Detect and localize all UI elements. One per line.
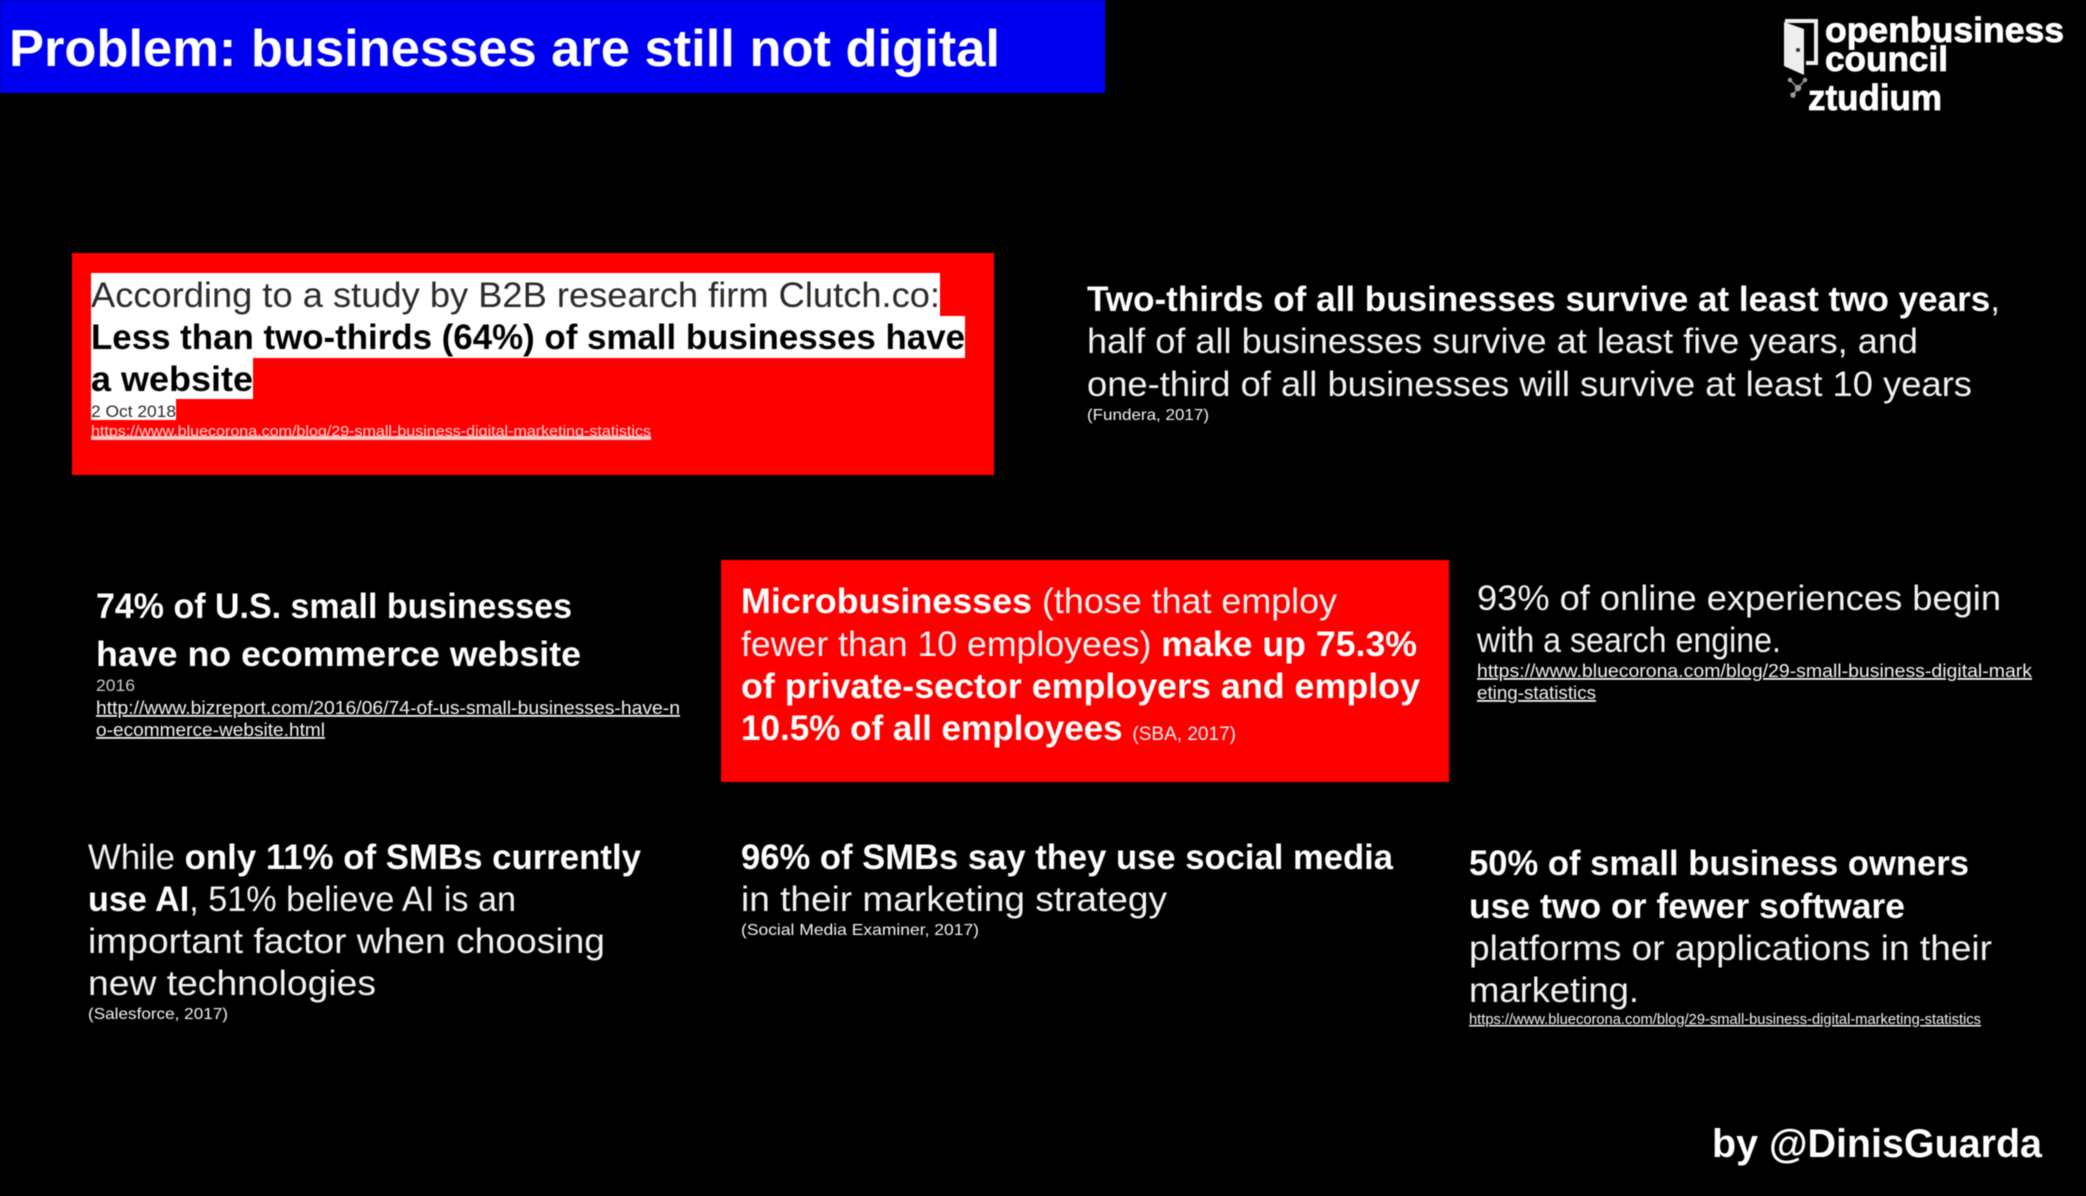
text block: search engine: 93% of online experiences begin	[1477, 579, 2001, 618]
text block: ecommerce statistic: o-ecommerce-website.html	[96, 720, 325, 740]
text block: search engine: https://www.bluecorona.com/blog/29-small-business-digital-mark	[1477, 661, 2033, 681]
text block: AI adoption: While only 11% of SMBs currently	[88, 838, 642, 877]
author credit: by @DinisGuarda	[1712, 1122, 2043, 1166]
text block: search engine	[1476, 579, 2033, 703]
text block: ecommerce statistic: 74% of U.S. small businesses	[96, 587, 572, 626]
logo: open business council and ztudium: council	[1825, 40, 1948, 79]
text block: AI adoption: use AI, 51% believe AI is an	[88, 880, 516, 919]
panel: microbusinesses: of private-sector employers and employ	[741, 667, 1421, 706]
panel: website statistic: 2 Oct 2018	[91, 402, 176, 421]
text block: ecommerce statistic: 2016	[96, 676, 135, 695]
text block: software platforms: use two or fewer software	[1469, 887, 1905, 926]
title banner: Problem: businesses are still not digital	[9, 20, 1000, 78]
text block: ecommerce statistic: have no ecommerce website	[96, 635, 581, 674]
logo: open business council and ztudium: openbusiness	[1825, 11, 2064, 50]
text block: AI adoption: (Salesforce, 2017)	[88, 1006, 228, 1023]
panel: microbusinesses: Microbusinesses (those that employ	[741, 582, 1338, 621]
text block: ecommerce statistic	[96, 587, 680, 740]
text block: business survival: Two-thirds of all businesses survive at least two years,	[1087, 280, 2000, 319]
text block: social media: 96% of SMBs say they use social media	[741, 838, 1394, 877]
text block: software platforms: https://www.bluecorona.com/blog/29-small-business-digital-marketing-statistics	[1469, 1011, 1981, 1028]
icon: network node	[1788, 78, 1806, 97]
text block: software platforms: platforms or applications in their	[1469, 929, 1992, 968]
text block: business survival: half of all businesses survive at least five years, and	[1087, 322, 1918, 361]
text block: social media: in their marketing strategy	[741, 880, 1168, 919]
text block: search engine: with a search engine.	[1476, 621, 1781, 660]
text block: AI adoption: important factor when choosing	[88, 922, 605, 961]
title banner	[0, 0, 1105, 93]
text block: social media	[741, 838, 1394, 939]
text block: search engine: eting-statistics	[1477, 683, 1596, 703]
panel: website statistic: https://www.bluecorona.com/blog/29-small-business-digital-marketing-statistics	[91, 423, 651, 440]
icon: door	[1784, 19, 1818, 75]
panel: website statistic: Less than two-thirds (64%) of small businesses have	[91, 318, 965, 357]
logo: open business council and ztudium: ztudium	[1808, 77, 1942, 118]
text block: software platforms: 50% of small business owners	[1469, 844, 1969, 883]
panel: website statistic: According to a study by B2B research firm Clutch.co:	[91, 276, 940, 315]
text block: business survival: one-third of all businesses will survive at least 10 years	[1087, 365, 1972, 404]
text block: business survival: (Fundera, 2017)	[1087, 407, 1209, 424]
logo: open business council and ztudium	[1784, 11, 2064, 118]
panel: microbusinesses	[721, 560, 1449, 782]
text block: business survival	[1087, 280, 2000, 424]
panel: microbusinesses: 10.5% of all employees (SBA, 2017)	[741, 709, 1236, 748]
panel: microbusinesses: fewer than 10 employees) make up 75.3%	[741, 625, 1417, 664]
panel: website statistic: a website	[91, 360, 253, 399]
text block: software platforms	[1469, 844, 1992, 1028]
text block: AI adoption	[88, 838, 642, 1023]
text block: software platforms: marketing.	[1469, 971, 1639, 1010]
text block: ecommerce statistic: http://www.bizreport.com/2016/06/74-of-us-small-businesses-have-n	[96, 698, 680, 718]
text block: AI adoption: new technologies	[88, 964, 376, 1003]
panel: website statistic	[72, 253, 994, 475]
text block: social media: (Social Media Examiner, 2017)	[741, 922, 979, 939]
